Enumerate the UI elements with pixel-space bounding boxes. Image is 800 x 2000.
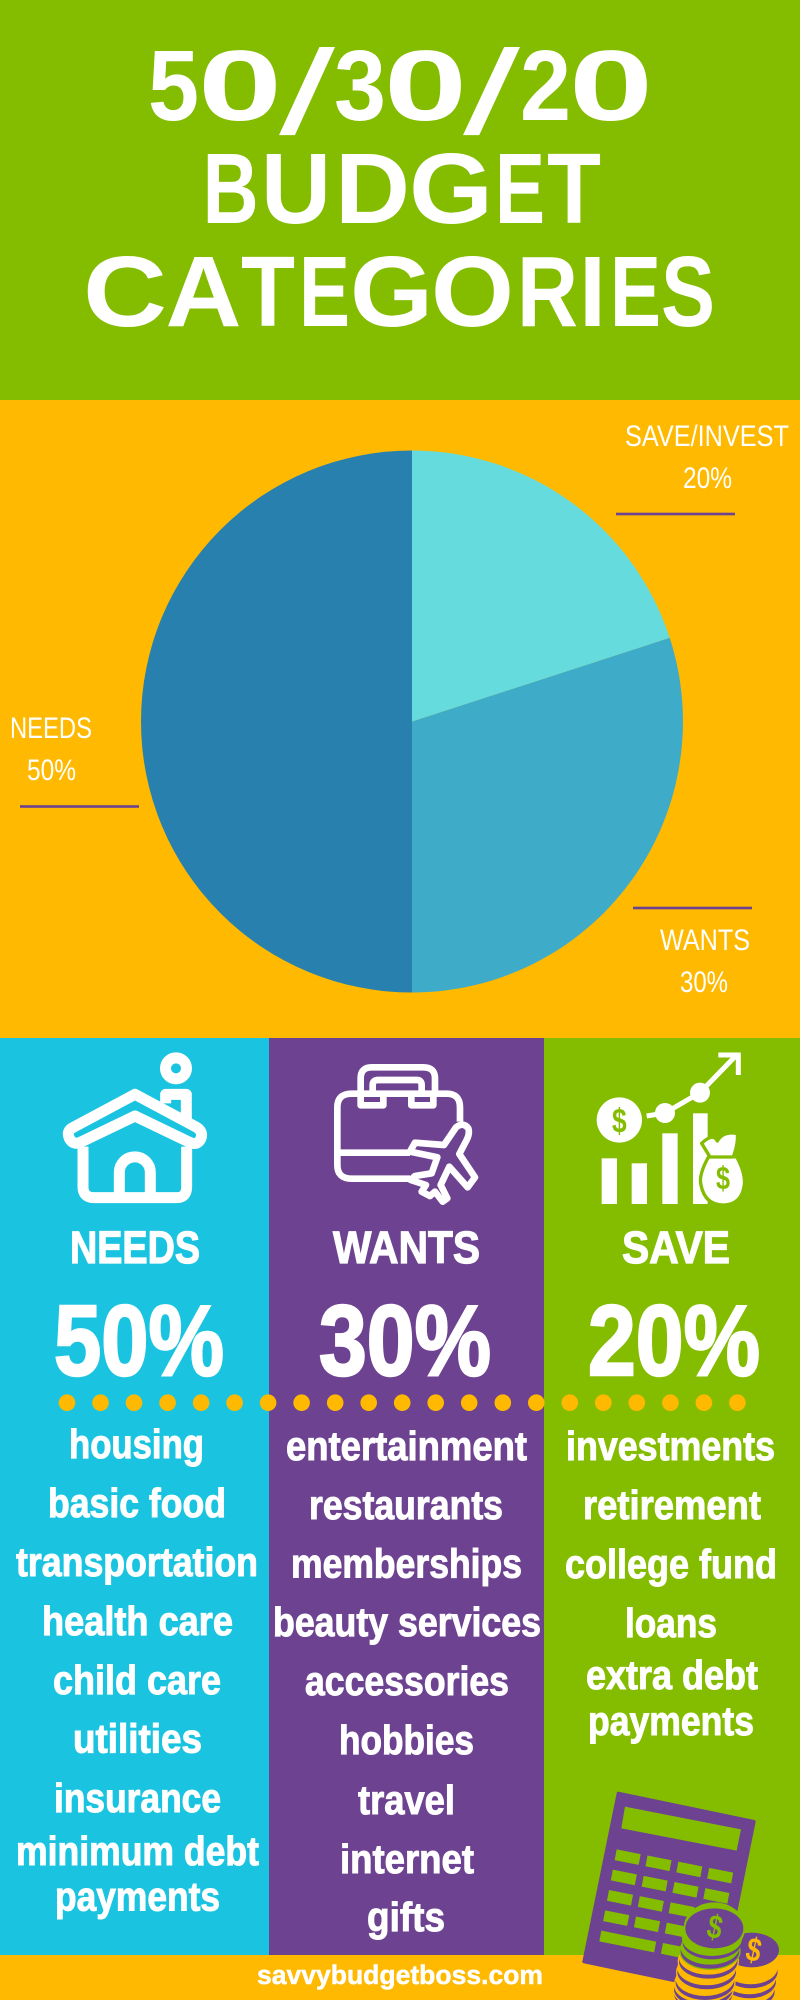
callout: save/invest 20% [616, 420, 789, 515]
stat: 20%: 20% [588, 1285, 760, 1397]
title line 3: I [579, 236, 606, 348]
title line 1: 3 [334, 30, 386, 142]
list: needs items [16, 1421, 259, 1920]
coins: front stack [673, 1902, 745, 2000]
title line 3: R [517, 236, 578, 348]
icon: briefcase and plane [337, 1067, 475, 1202]
list: save items: payments [588, 1698, 754, 1744]
title line 1: / [463, 26, 521, 160]
pie chart [141, 450, 683, 992]
list: wants items: gifts [367, 1894, 445, 1940]
list: wants items: memberships [291, 1540, 522, 1586]
icon: growth chart and money [597, 1055, 744, 1205]
list: save items: loans [625, 1600, 717, 1646]
list: needs items: payments [55, 1874, 220, 1920]
callout: wants 30%: 30% [680, 966, 728, 999]
title line 3: A [166, 236, 242, 348]
list: needs items: child care [53, 1657, 221, 1703]
list: wants items: travel [358, 1777, 455, 1823]
title line 3: G [350, 236, 433, 348]
icon: calculator and coins [584, 1793, 779, 2000]
title line 1: 5 [148, 30, 199, 142]
title line 3: C [83, 236, 167, 348]
panel: wants column [269, 1038, 544, 1955]
list: save items: extra debt [586, 1652, 758, 1698]
list: needs items: health care [42, 1598, 233, 1644]
coins: back stack [720, 1931, 779, 2000]
panel: pie chart section [0, 400, 800, 1038]
title line 1: 0 [569, 30, 653, 142]
list: wants items: restaurants [309, 1482, 503, 1528]
heading: wants: WANTS [333, 1222, 480, 1273]
title line 2: D [335, 133, 410, 245]
list: wants items: hobbies [339, 1717, 474, 1763]
panel: needs column [0, 1038, 269, 1955]
title line 1: / [279, 26, 336, 160]
callout: needs 50%: 50% [27, 754, 76, 787]
callout: needs 50% [10, 712, 139, 808]
title line 3: S [661, 236, 715, 348]
list: needs items: minimum debt [16, 1828, 259, 1874]
title line 3: O [431, 236, 514, 348]
list: save items: retirement [583, 1482, 761, 1528]
title line 2: E [495, 133, 545, 245]
list: wants items [273, 1423, 541, 1940]
title line 1: 0 [198, 30, 282, 142]
list: wants items: beauty services [273, 1599, 541, 1645]
icon: growth chart and money: $ [716, 1159, 730, 1196]
list: save items [565, 1423, 777, 1744]
heading: save: SAVE [622, 1222, 730, 1273]
calculator [584, 1793, 754, 1990]
list: wants items: accessories [305, 1658, 509, 1704]
list: wants items: entertainment [286, 1423, 527, 1469]
title line 3: E [299, 236, 350, 348]
dotted divider [59, 1394, 746, 1411]
icon: growth chart and money: $ [612, 1102, 627, 1140]
list: needs items: basic food [48, 1480, 226, 1526]
panel: title banner [0, 0, 800, 400]
list: needs items: utilities [73, 1716, 202, 1762]
stat: 30%: 30% [319, 1285, 491, 1397]
callout: wants 30% [633, 907, 752, 999]
pie slice: needs 50% [141, 450, 412, 992]
heading: needs: NEEDS [70, 1222, 200, 1273]
list: needs items: insurance [54, 1775, 221, 1821]
list: wants items: internet [340, 1836, 474, 1882]
title line 2: B [203, 133, 259, 245]
title line 1: 2 [520, 30, 571, 142]
icon: house [68, 1058, 202, 1198]
title line 2: G [409, 133, 493, 245]
pie slice: wants 30% [412, 638, 683, 992]
panel: save column [544, 1038, 800, 1955]
title line 3: T [241, 236, 295, 348]
coins: back stack: $ [743, 1931, 765, 1970]
title line 2: U [261, 133, 331, 245]
pie slice: save 20% [412, 450, 670, 722]
callout: needs 50%: NEEDS [10, 712, 92, 745]
coins: front stack: $ [704, 1908, 726, 1947]
callout: save/invest 20%: 20% [683, 462, 732, 495]
stat: 50%: 50% [54, 1285, 224, 1397]
list: needs items: transportation [16, 1539, 258, 1585]
panel: footer bar [0, 1955, 800, 2000]
title line 3: E [610, 236, 661, 348]
title line 1: 0 [384, 30, 467, 142]
list: save items: investments [566, 1423, 775, 1469]
callout: wants 30%: WANTS [660, 924, 750, 957]
list: save items: college fund [565, 1541, 777, 1587]
title line 2: T [547, 133, 601, 245]
footer website text: savvybudgetboss.com [257, 1960, 543, 1990]
list: needs items: housing [69, 1421, 204, 1467]
